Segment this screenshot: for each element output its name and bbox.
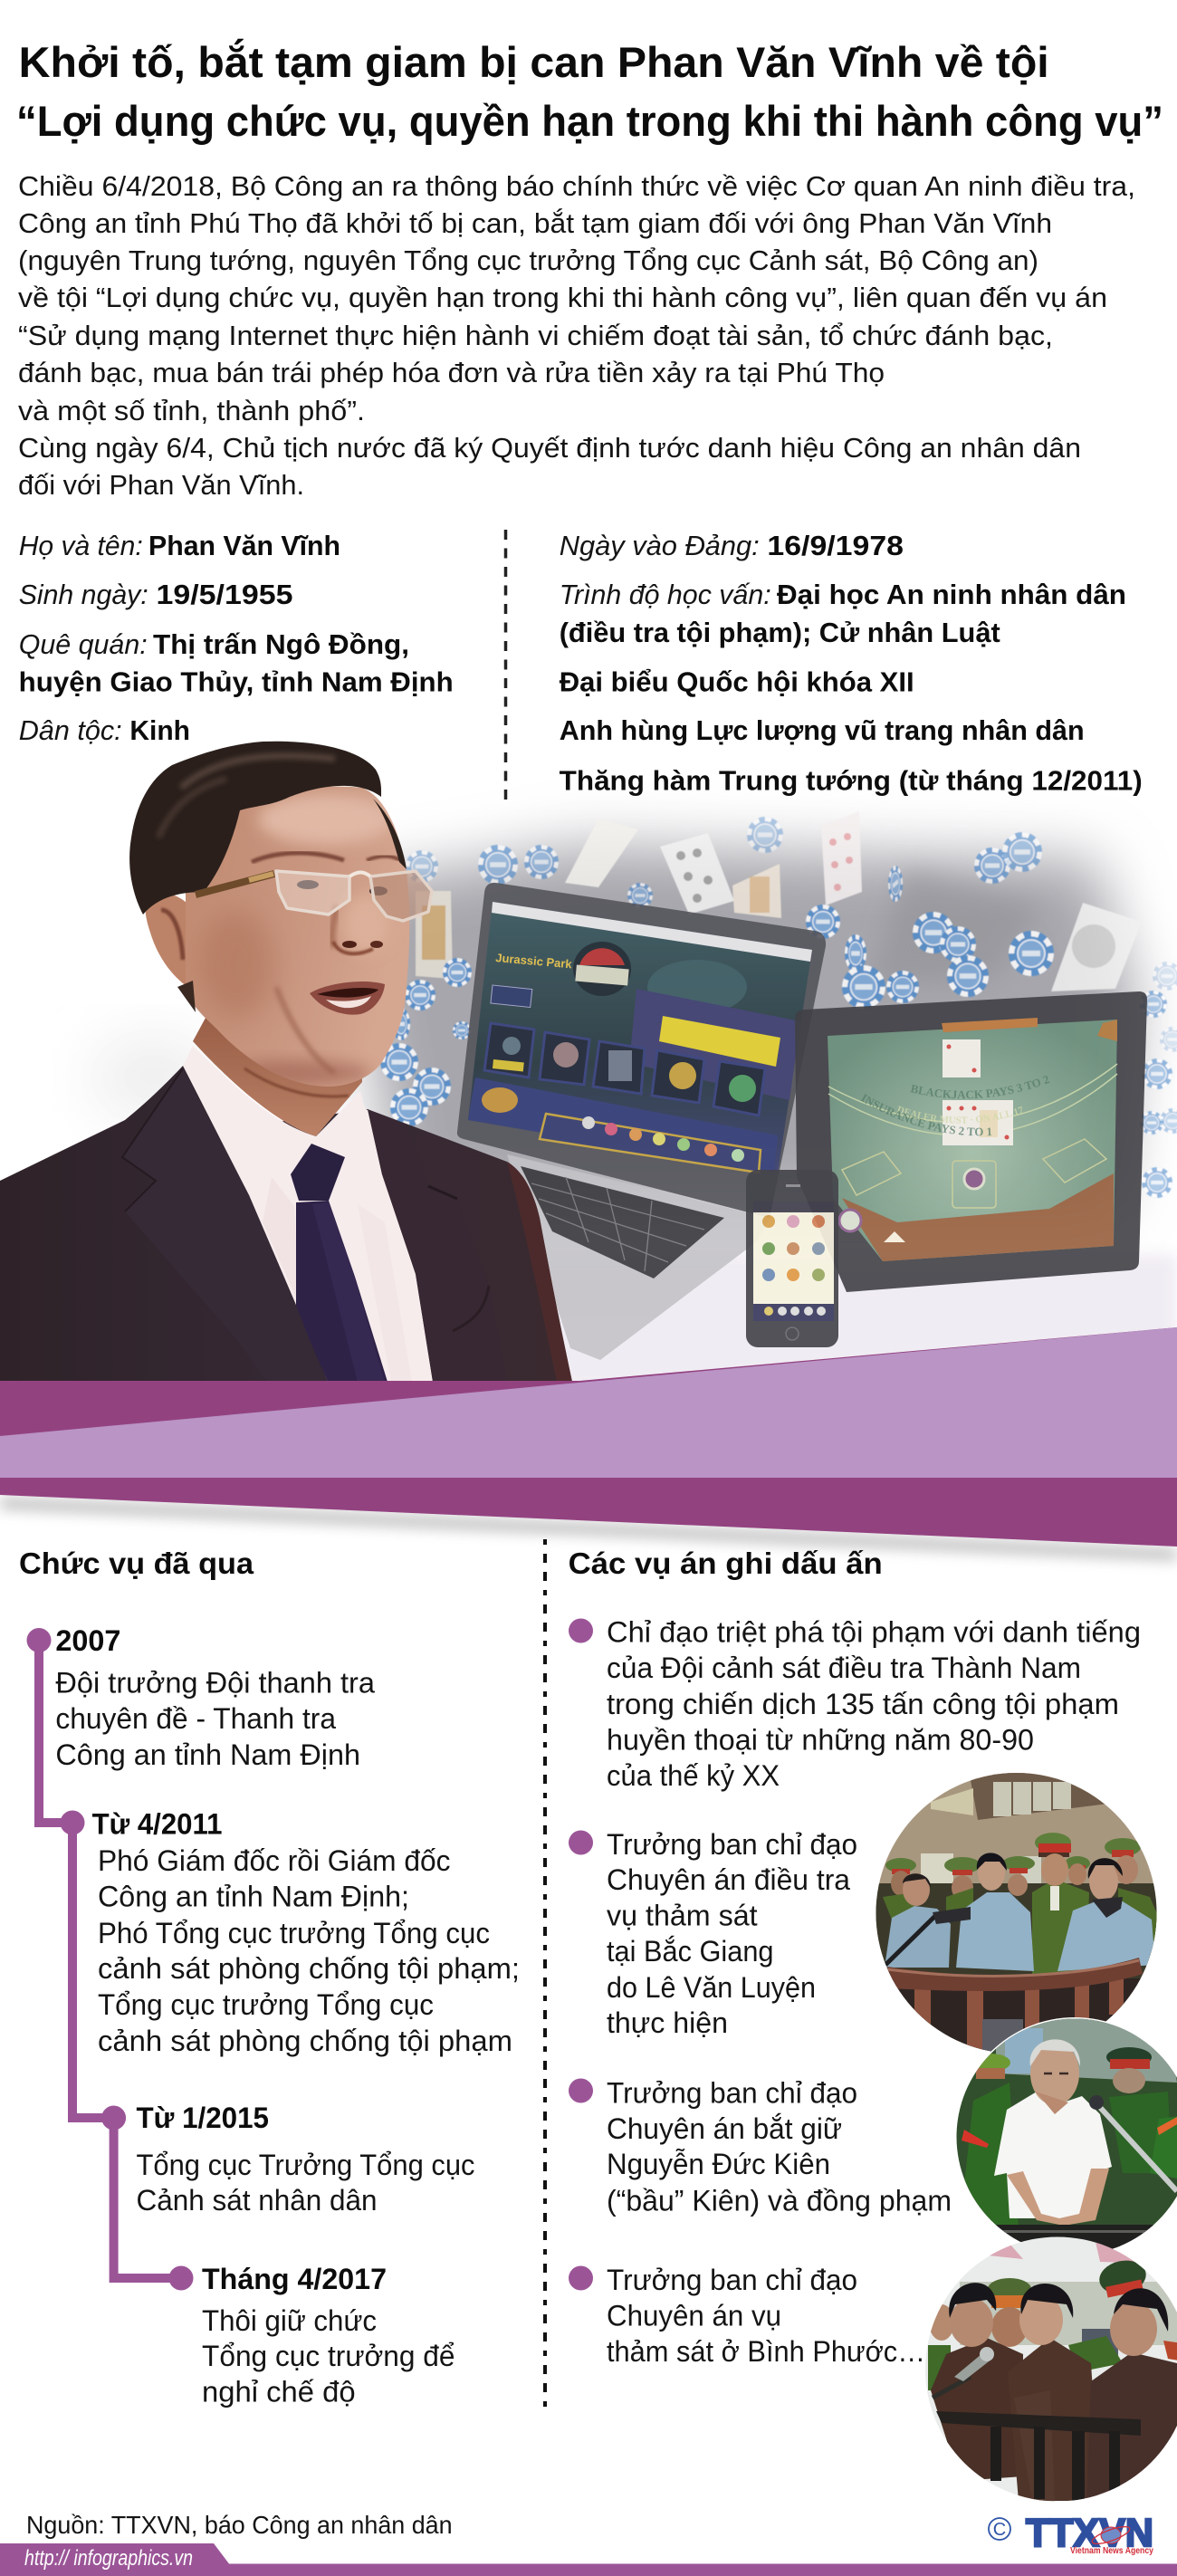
timeline item 4/2011: Từ 4/2011 [92, 1807, 222, 1840]
case bullet 1: của thế kỷ XX [607, 1759, 780, 1792]
laptop base and keyboard [507, 1154, 770, 1360]
Jurassic Park label: Jurassic Park [495, 951, 573, 971]
timeline item 4/2011: Phó Tổng cục trưởng Tổng cục [98, 1917, 490, 1949]
face [186, 786, 409, 1087]
case bullet 2: vụ thảm sát [607, 1900, 758, 1932]
intro text block: “Sử dụng mạng Internet thực hiện hành vi chiếm đoạt tài sản, tổ chức đánh bạc, [18, 320, 1053, 351]
blackjack table lettering: DEALER MUST · ON ALL 17 [896, 1106, 1022, 1124]
case bullet 2: thực hiện [607, 2006, 728, 2039]
career timeline connector [39, 1640, 181, 2278]
personal info left column: Phan Văn Vĩnh [148, 530, 340, 561]
Jurassic Park label [491, 951, 573, 1007]
heading: career positions: Chức vụ đã qua [19, 1547, 254, 1580]
timeline item 1/2015: Cảnh sát nhân dân [136, 2184, 377, 2217]
case bullet 3: (“bầu” Kiên) và đồng phạm [607, 2184, 952, 2217]
defendants in brown [931, 2283, 1177, 2504]
timeline item 4/2011: Công an tỉnh Nam Định; [98, 1881, 409, 1913]
defendant [994, 2039, 1112, 2226]
personal info left column: Kinh [129, 714, 190, 746]
case bullet 4: Trưởng ban chỉ đạo [607, 2264, 857, 2296]
case bullet 3: Chuyên án bắt giữ [607, 2112, 842, 2145]
footer bar with website url [0, 2543, 1177, 2576]
eyebrows [252, 853, 344, 862]
jacket lapels [122, 1068, 507, 1382]
case bullet 2: Trưởng ban chỉ đạo [607, 1828, 857, 1861]
timeline item 2007: Đội trưởng Đội thanh tra [55, 1666, 375, 1699]
necktie [291, 1144, 388, 1382]
case bullet 4: Chuyên án vụ [607, 2300, 781, 2332]
neck [193, 996, 362, 1136]
intro text block: và một số tỉnh, thành phố”. [18, 395, 365, 426]
illustration: online gambling backdrop [91, 811, 1177, 1390]
personal info right column: (điều tra tội phạm); Cử nhân Luật [560, 617, 1000, 648]
case photo 3: defendants in brown uniforms [919, 2232, 1177, 2504]
guards in green [960, 2047, 1177, 2227]
title: “Lợi dụng chức vụ, quyền hạn trong khi thi hành công vụ” [16, 97, 1163, 145]
case bullet 3 [569, 2077, 952, 2217]
timeline item 4/2017: Tổng cục trưởng để [202, 2340, 455, 2372]
case bullet 4 [569, 2264, 925, 2368]
intro text block: đối với Phan Văn Vĩnh. [18, 469, 304, 501]
personal info left column: Thị trấn Ngô Đồng, [153, 628, 409, 660]
timeline item 4/2011: Phó Giám đốc rồi Giám đốc [98, 1844, 451, 1877]
nostrils [342, 941, 357, 948]
intro text block: đánh bạc, mua bán trái phép hóa đơn và rửa tiền xảy ra tại Phú Thọ [18, 357, 885, 388]
personal info right column [560, 530, 1143, 797]
purple ribbon band [0, 1327, 1177, 1559]
source note: Nguồn: TTXVN, báo Công an nhân dân [26, 2511, 453, 2539]
footer bar with website url: http:// infographics.vn [24, 2546, 193, 2571]
illustration: smartphone [746, 1170, 838, 1347]
ear [146, 894, 196, 991]
illustration: laptop with casino site [457, 883, 826, 1360]
timeline item 4/2011: cảnh sát phòng chống tội phạm [98, 2025, 512, 2057]
case bullet 1: huyền thoại từ những năm 80-90 [607, 1724, 1034, 1757]
timeline item 1/2015 [101, 2102, 474, 2217]
copyright mark and TTXVN logo: C [993, 2520, 1006, 2540]
heading: notable cases: Các vụ án ghi dấu ấn [569, 1547, 883, 1580]
personal info right column: Anh hùng Lực lượng vũ trang nhân dân [560, 714, 1085, 746]
playing cards [416, 811, 1142, 991]
casino chips [380, 817, 1177, 1198]
timeline item 1/2015: Từ 1/2015 [136, 2102, 269, 2134]
timeline item 1/2015: Tổng cục Trưởng Tổng cục [136, 2149, 474, 2181]
case bullet 1 [569, 1616, 1141, 1792]
personal info left column [19, 530, 454, 746]
title [16, 38, 1163, 145]
personal info left column: Họ và tên: [19, 530, 143, 561]
guards behind defendants [928, 2256, 1177, 2390]
timeline item 2007: 2007 [55, 1624, 120, 1657]
intro text block: Cùng ngày 6/4, Chủ tịch nước đã ký Quyết định tước danh hiệu Công an nhân dân [18, 432, 1081, 464]
timeline item 4/2011 [60, 1807, 520, 2057]
laptop screen [457, 883, 826, 1218]
case bullet 3: Nguyễn Đức Kiên [607, 2148, 830, 2180]
case bullet 2 [569, 1828, 857, 2039]
dock rail [936, 2411, 1141, 2504]
copyright mark and TTXVN logo: Vietnam News Agency [1070, 2545, 1153, 2556]
intro text block: về tội “Lợi dụng chức vụ, quyền hạn trong khi thi hành công vụ”, liên quan đến vụ án [18, 282, 1107, 313]
personal info left column: Dân tộc: [19, 714, 122, 746]
timeline item 2007: chuyên đề - Thanh tra [55, 1702, 336, 1735]
personal info right column: Trình độ học vấn: [560, 579, 771, 610]
timeline item 4/2011: cảnh sát phòng chống tội phạm; [98, 1952, 520, 1985]
timeline item 4/2017 [168, 2263, 455, 2408]
personal info left column: huyện Giao Thủy, tỉnh Nam Định [19, 666, 454, 697]
blackjack table lettering: BLACKJACK PAYS 3 TO 2 [910, 1076, 1050, 1099]
timeline item 2007: Công an tỉnh Nam Định [55, 1738, 360, 1771]
case bullet 4: thảm sát ở Bình Phước… [607, 2335, 925, 2368]
microphone [933, 2347, 994, 2398]
intro text block: (nguyên Trung tướng, nguyên Tổng cục trưởng Tổng cục Cảnh sát, Bộ Công an) [18, 244, 1038, 276]
courtroom railing [887, 1958, 1143, 2055]
mouth [310, 982, 385, 1015]
intro text block: Chiều 6/4/2018, Bộ Công an ra thông báo chính thức về việc Cơ quan An ninh điều tra, [18, 170, 1135, 202]
intro text block [18, 170, 1135, 501]
personal info left column: Quê quán: [19, 628, 148, 660]
case bullet 2: do Lê Văn Luyện [607, 1971, 816, 2004]
timeline item 4/2017: Tháng 4/2017 [202, 2263, 387, 2295]
portrait: man in suit [0, 742, 572, 1382]
blackjack table lettering [860, 1076, 1050, 1135]
personal info right column: Thăng hàm Trung tướng (từ tháng 12/2011) [560, 765, 1143, 797]
personal info left column: Sinh ngày: [19, 579, 148, 610]
case bullet 2: Chuyên án điều tra [607, 1863, 850, 1896]
guard in green uniform [1032, 1833, 1089, 1974]
case bullet 3: Trưởng ban chỉ đạo [607, 2077, 857, 2110]
personal info right column: 16/9/1978 [767, 530, 904, 561]
timeline item 4/2017: Thôi giữ chức [202, 2304, 377, 2337]
eyes [297, 880, 319, 889]
case bullet 1: Chỉ đạo triệt phá tội phạm với danh tiếng [607, 1616, 1141, 1649]
timeline item 2007 [27, 1624, 375, 1771]
illustration: tablet with blackjack table [795, 991, 1147, 1292]
case bullet 1: của Đội cảnh sát điều tra Thành Nam [607, 1652, 1081, 1684]
title: Khởi tố, bắt tạm giam bị can Phan Văn Vĩnh về tội [19, 38, 1049, 86]
case photo 1: courtroom trial [869, 1770, 1168, 2060]
timeline item 4/2011: Tổng cục trưởng Tổng cục [98, 1988, 434, 2021]
glasses [196, 871, 432, 921]
defendants in blue shirts [885, 1853, 1155, 1971]
suit jacket [0, 1066, 572, 1382]
personal info right column: Đại biểu Quốc hội khóa XII [560, 666, 914, 697]
personal info right column: Ngày vào Đảng: [560, 530, 760, 561]
case bullet 1: trong chiến dịch 135 tấn công tội phạm [607, 1688, 1119, 1720]
hair [129, 742, 407, 1012]
intro text block: Công an tỉnh Phú Thọ đã khởi tố bị can, bắt tạm giam đối với ông Phan Văn Vĩnh [18, 207, 1052, 239]
case bullet 2: tại Bắc Giang [607, 1935, 773, 1968]
copyright mark and TTXVN logo: TTXVN [1026, 2511, 1153, 2555]
timeline item 4/2017: nghỉ chế độ [202, 2376, 356, 2408]
blackjack table lettering: INSURANCE PAYS 2 TO 1 [860, 1094, 992, 1135]
personal info right column: Đại học An ninh nhân dân [777, 579, 1126, 610]
shirt [183, 1046, 433, 1382]
case photo 2: white-shirt defendant [951, 2015, 1177, 2261]
personal info left column: 19/5/1955 [156, 579, 293, 610]
